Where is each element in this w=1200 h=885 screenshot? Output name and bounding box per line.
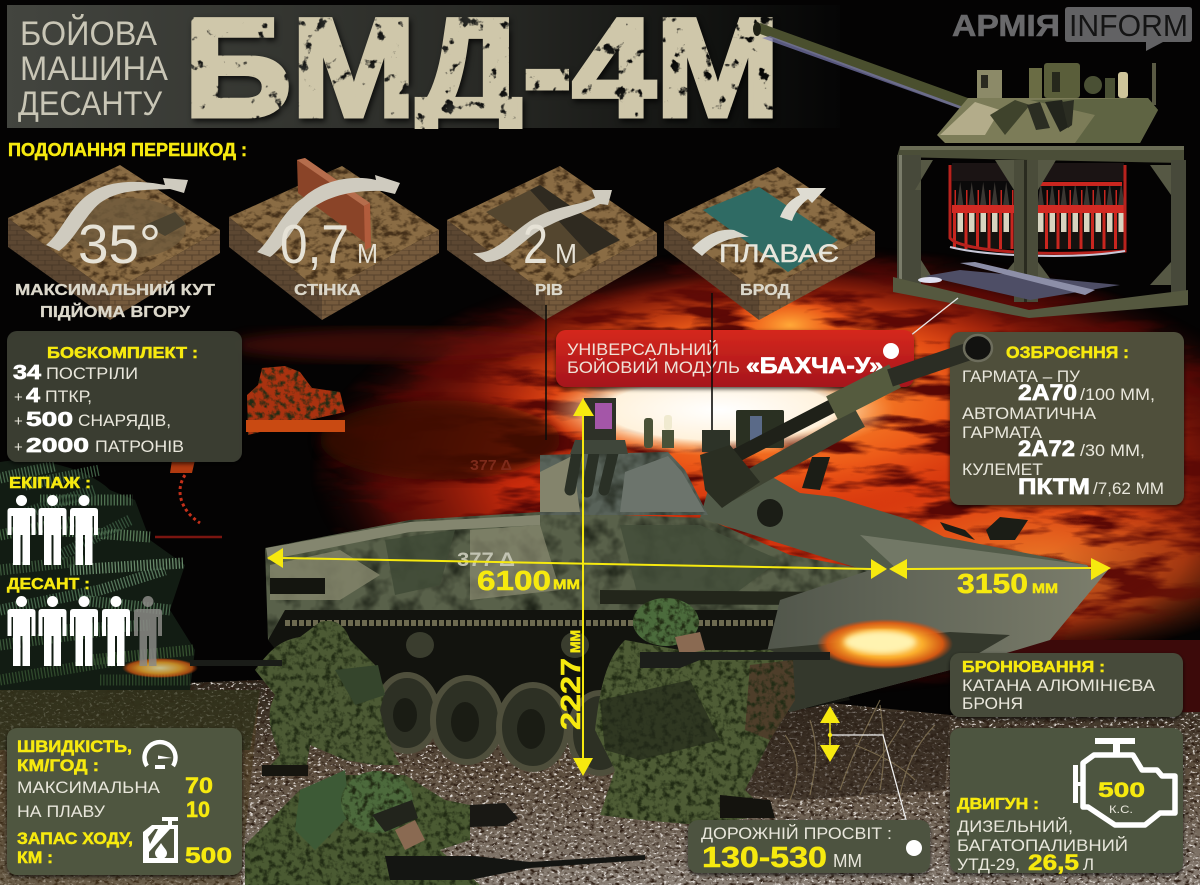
track — [285, 620, 790, 626]
hull side — [265, 512, 880, 640]
turret — [540, 452, 708, 515]
panel: engine: 26,5 — [1028, 850, 1079, 875]
panel: ground clearance: ДОРОЖНІЙ ПРОСВІТ : — [701, 824, 892, 843]
floor — [925, 270, 1120, 300]
fittings — [757, 457, 1028, 540]
front deck — [700, 470, 1092, 572]
icon: engine — [1073, 738, 1175, 825]
panel: engine: ДВИГУН : — [957, 796, 1039, 813]
dimension: length 6100: 6100 — [477, 565, 551, 596]
ammo rack — [950, 163, 1125, 256]
panel: ammunition: 2000 — [26, 435, 89, 457]
crew: ЕКІПАЖ : — [9, 475, 91, 492]
panel: speed and range: ШВИДКІСТЬ, — [17, 737, 132, 756]
panel: ground clearance: ММ — [833, 851, 862, 871]
dimension: height 2227 — [555, 398, 594, 776]
obstacle: ditch 2 m — [447, 166, 657, 320]
guns — [708, 351, 970, 492]
obstacle: wall 0.7 m — [229, 158, 439, 320]
panel: ammunition: + — [14, 389, 23, 406]
panel: armament: /100 ММ, — [1080, 385, 1155, 404]
panel: engine: УТД-29, — [957, 855, 1020, 874]
obstacle: ditch 2 m: 2 — [523, 213, 548, 275]
logo: INFORM — [1069, 8, 1188, 43]
background tank silhouette: 377 Δ — [470, 457, 512, 474]
obstacle: slope 35 degrees: 35° — [78, 213, 161, 275]
pointer line to module — [891, 298, 958, 351]
panel: speed and range: МАКСИМАЛЬНА — [17, 778, 161, 797]
panel: engine: К.С. — [1109, 804, 1133, 816]
panel: armament: /30 ММ, — [1080, 441, 1145, 460]
nose — [760, 570, 1108, 712]
arrow — [257, 175, 400, 257]
panel: speed and range: КМ : — [17, 848, 53, 867]
obstacle: wall 0.7 m: М — [357, 238, 378, 269]
dimension: height 2227: ММ — [567, 630, 583, 653]
obstacle: wall 0.7 m: СТІНКА — [294, 282, 362, 299]
label: МАКСИМАЛЬНИЙ КУТ — [15, 280, 215, 299]
panel: ammunition: + — [14, 439, 23, 456]
panel: armour: БРОНЯ — [962, 694, 1023, 713]
turret module with ammo rack — [753, 22, 1188, 318]
panel: ammunition: БОЄКОМПЛЕКТ : — [47, 345, 198, 362]
title band — [7, 5, 840, 128]
gun — [755, 23, 990, 118]
panel: speed and range: 70 — [185, 773, 213, 798]
hatches — [977, 63, 1156, 105]
dimension: height 2227: 2227 — [555, 658, 586, 730]
panel: armament: ГАРМАТА – ПУ — [962, 367, 1080, 386]
arrow — [46, 178, 188, 251]
panel: ammunition: 500 — [26, 409, 73, 431]
panel: ammunition: + — [14, 413, 23, 430]
panel: ground clearance: 130-530 — [702, 842, 827, 874]
panel: armour: КАТАНА АЛЮМІНІЄВА — [962, 676, 1156, 695]
panel: armour: БРОНЮВАННЯ : — [962, 659, 1105, 676]
panel: speed and range: 500 — [185, 843, 232, 868]
troop icons — [8, 596, 162, 666]
panel: ammunition: 4 — [26, 385, 41, 407]
panel: engine: ДИЗЕЛЬНИЙ, — [957, 817, 1073, 836]
panel: ground clearance — [688, 820, 930, 874]
airborne troops: ДЕСАНТ : — [7, 576, 90, 593]
panel: armament: АВТОМАТИЧНА — [962, 404, 1097, 423]
logo: АРМІЯ — [952, 8, 1060, 43]
panel: universal combat module — [556, 330, 914, 387]
soldier 3 — [245, 770, 645, 885]
muzzle flash — [817, 619, 953, 669]
subtitle: бойова машина десанту — [18, 15, 168, 123]
panel: ammunition: ПОСТРІЛИ — [46, 364, 138, 383]
panel: universal combat module: БОЙОВИЙ МОДУЛЬ — [567, 358, 740, 377]
panel: universal combat module: УНІВЕРСАЛЬНИЙ — [567, 340, 719, 359]
panel: armament: 2А72 — [1018, 436, 1075, 461]
panel: engine — [950, 728, 1183, 875]
crew icons — [8, 495, 98, 565]
obstacle: slope 35 degrees — [8, 165, 220, 321]
obstacle: ditch 2 m: РІВ — [535, 282, 563, 299]
under hull — [268, 600, 850, 740]
return rollers — [406, 632, 589, 658]
hull camouflage — [266, 515, 780, 605]
heading: obstacles: ПОДОЛАННЯ ПЕРЕШКОД : — [8, 140, 247, 160]
panel: armament — [950, 332, 1184, 505]
panel: armament: 2А70 — [1018, 380, 1077, 405]
background tank silhouette — [155, 366, 512, 537]
panel: speed and range: КМ/ГОД : — [17, 756, 99, 775]
panel: speed and range: НА ПЛАВУ — [17, 802, 105, 821]
obstacle: ditch 2 m: М — [555, 238, 577, 269]
panel: ammunition: ПТКР, — [45, 387, 92, 406]
soldier 2 — [595, 598, 830, 825]
panel: ammunition: ПАТРОНІВ — [95, 437, 184, 456]
panel: armament: ГАРМАТА — [962, 423, 1043, 442]
dimension: width 3150: 3150 — [957, 568, 1028, 599]
panel: speed and range: 10 — [186, 797, 210, 822]
panel: ammunition: 34 — [13, 362, 42, 384]
pine tree — [0, 460, 195, 690]
airborne troops — [7, 576, 162, 666]
soldier 1 — [190, 621, 400, 776]
dimension: length 6100: ММ — [553, 576, 580, 592]
obstacle: ford: БРОД — [740, 282, 791, 299]
sensors — [644, 410, 784, 452]
dimension: length 6100 — [267, 548, 887, 596]
hull number: 377 Δ — [457, 550, 515, 571]
smoke launchers — [570, 452, 613, 492]
label — [15, 280, 215, 321]
road wheels — [377, 675, 630, 773]
panel: engine: Л — [1083, 855, 1094, 874]
panel: armament: ОЗБРОЄННЯ : — [1006, 343, 1129, 362]
turret body — [937, 98, 1158, 143]
subtitle: бойова машина десанту: ДЕСАНТУ — [18, 85, 162, 123]
panel: speed and range: ЗАПАС ХОДУ, — [17, 829, 133, 848]
tank — [265, 293, 1108, 773]
obstacle: ford: ПЛАВАЄ — [719, 240, 839, 268]
panel: ammunition: СНАРЯДІВ, — [78, 411, 171, 430]
obstacle: ford — [664, 167, 875, 320]
dimension: width 3150 — [889, 558, 1111, 599]
panel: armour — [950, 653, 1183, 717]
label: ПІДЙОМА ВГОРУ — [40, 302, 191, 321]
dimension: ground clearance — [820, 706, 912, 842]
logo — [952, 7, 1192, 51]
dry grass — [500, 700, 935, 800]
panel: engine: 500 — [1098, 779, 1145, 802]
panel: universal combat module: «БАХЧА-У» — [746, 353, 883, 378]
panel: engine: БАГАТОПАЛИВНИЙ — [957, 836, 1128, 855]
subtitle: бойова машина десанту: БОЙОВА — [20, 15, 157, 53]
antennas — [546, 293, 712, 440]
sight — [570, 398, 628, 454]
panel: ammunition — [7, 331, 242, 462]
arrow — [473, 190, 612, 262]
panel: speed and range — [7, 728, 242, 875]
muzzle flash small — [122, 658, 198, 678]
panel: armament: КУЛЕМЕТ — [962, 460, 1043, 479]
panel: armament: ПКТМ — [1018, 474, 1090, 499]
arrows — [692, 230, 749, 256]
icon: speedometer — [144, 742, 175, 769]
subtitle: бойова машина десанту: МАШИНА — [20, 50, 168, 88]
frame — [897, 146, 1186, 302]
obstacle: wall 0.7 m: 0,7 — [280, 213, 349, 275]
icon: fuel can — [143, 817, 178, 863]
crew — [8, 475, 98, 565]
dimension: width 3150: ММ — [1032, 580, 1058, 596]
panel: armament: /7,62 ММ — [1093, 479, 1164, 498]
ground — [0, 680, 1200, 885]
